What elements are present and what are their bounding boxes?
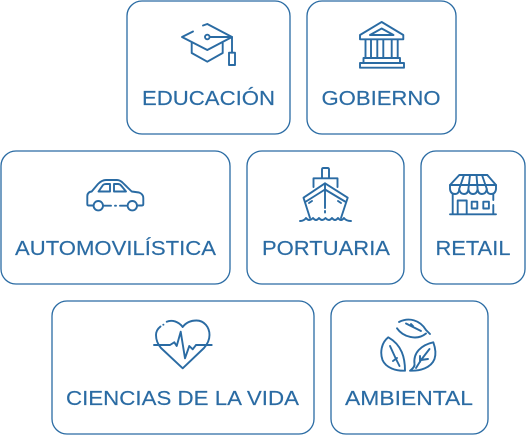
- panel: retail: [421, 151, 525, 284]
- panel: ciencias de la vida: [52, 301, 314, 434]
- panel: ambiental: [331, 301, 488, 434]
- icon: graduation cap: [182, 24, 235, 65]
- label: educación: EDUCACIÓN: [142, 87, 275, 110]
- icon: heart with pulse: [154, 320, 212, 368]
- label: automovilística: AUTOMOVILÍSTICA: [15, 237, 217, 260]
- panel: automovilística: [1, 151, 230, 284]
- panel: educación: [127, 1, 290, 134]
- icon: government building: [360, 22, 404, 68]
- label: ambiental: AMBIENTAL: [345, 388, 473, 410]
- icon: recycling leaves: [381, 320, 435, 371]
- icon: car: [87, 180, 143, 210]
- icon: ship: [300, 168, 351, 221]
- label: ciencias de la vida: CIENCIAS DE LA VIDA: [66, 388, 300, 410]
- label: gobierno: GOBIERNO: [322, 88, 440, 110]
- panel: portuaria: [247, 151, 404, 284]
- label: portuaria: PORTUARIA: [262, 238, 391, 260]
- icon: storefront: [450, 175, 496, 214]
- panel: gobierno: [307, 1, 456, 134]
- label: retail: RETAIL: [436, 238, 510, 260]
